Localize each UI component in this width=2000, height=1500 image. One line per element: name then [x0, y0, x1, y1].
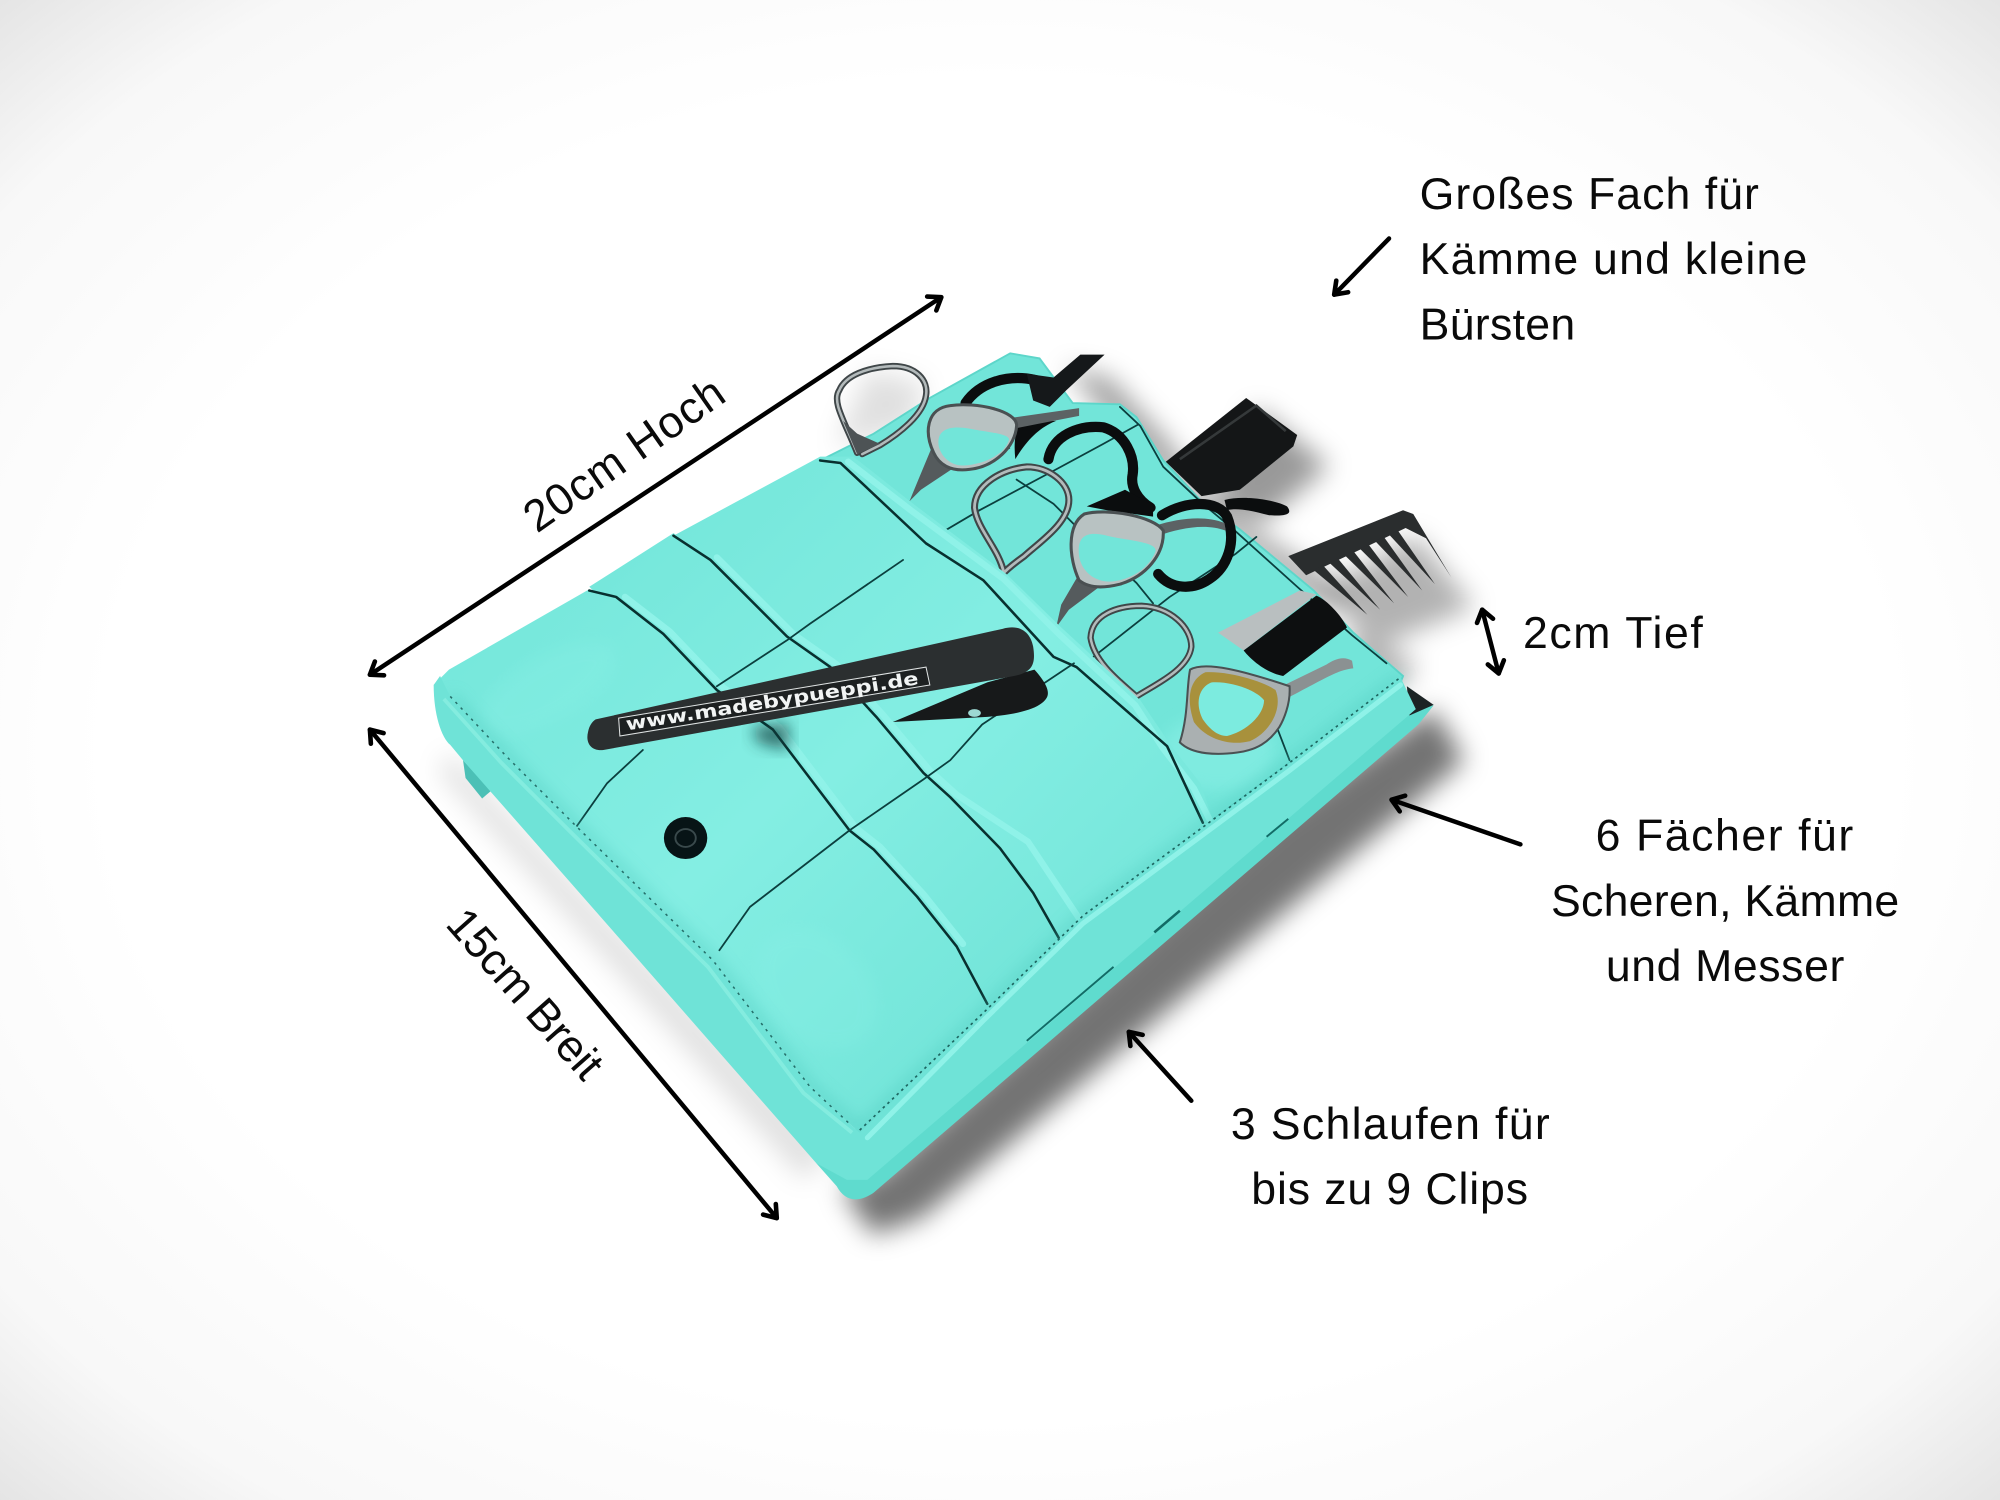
text: large compartment [1420, 170, 1807, 349]
pocket layer three [673, 457, 1213, 1013]
arrow: depth [1482, 610, 1499, 673]
snap button [664, 817, 707, 859]
pouch: back plate [463, 686, 1434, 1199]
clip label [619, 667, 930, 736]
tool: silver scissors thick ring middle [1056, 512, 1226, 628]
label: width: 15cm Breit [437, 899, 613, 1090]
label: height: 20cm Hoch [515, 368, 734, 542]
tool: black tail comb [1288, 510, 1452, 615]
cushion lip [434, 676, 1416, 1180]
hair clip www.madebypueppi.de [587, 627, 1048, 750]
cross stitch upper [717, 560, 903, 686]
text: six compartments: 6 Fächer für [1596, 812, 1853, 861]
arrow: height [370, 297, 941, 675]
arrow: six compartments [1392, 800, 1520, 844]
interior stitching [930, 407, 1386, 760]
arrow: width [370, 730, 777, 1218]
text: six compartments: und Messer [1606, 942, 1845, 991]
tool: black scissors right ring [1158, 498, 1289, 587]
lip inner shade [450, 677, 1401, 1130]
arrow: large compartment [1334, 239, 1389, 295]
tool: silver scissors ring thin middle [974, 467, 1069, 573]
text: three loops: 3 Schlaufen für [1231, 1100, 1550, 1149]
text: large compartment: Großes Fach für [1420, 170, 1759, 219]
tool: black scissors top [966, 355, 1105, 459]
clip label: www.madebypueppi.de [624, 668, 920, 735]
tool: silver and gold scissors ring [1180, 658, 1353, 754]
lip stitching [450, 696, 849, 1124]
text: three loops: bis zu 9 Clips [1251, 1165, 1528, 1214]
tool: silver scissors ring thin top [837, 366, 926, 454]
tool: silver scissors ring thin lower [1091, 606, 1191, 696]
text: large compartment: Bürsten [1420, 300, 1575, 349]
pocket layer two [589, 533, 1077, 1013]
text: six compartments: Scheren, Kämme [1551, 877, 1899, 926]
tool: black scissors middle [1048, 427, 1153, 517]
tool: silver scissors thick ring top [909, 405, 1079, 501]
text: three loops [1231, 1100, 1550, 1214]
tool: black wide comb handle [1166, 398, 1297, 496]
text: six compartments [1551, 812, 1899, 991]
text: large compartment: Kämme und kleine [1420, 235, 1807, 284]
cross stitch lower [719, 663, 1074, 950]
tool: razor with silver blade [1218, 591, 1347, 676]
pocket layer one [434, 589, 987, 1133]
pouch: front cushion with pockets [434, 457, 1416, 1180]
lip underside crease [1027, 967, 1114, 1041]
text: depth: 2cm Tief [1523, 609, 1703, 658]
pouch: upper interior panel [820, 353, 1403, 893]
pouch drop shadow [440, 367, 1474, 1235]
arrow: three loops [1129, 1032, 1191, 1101]
